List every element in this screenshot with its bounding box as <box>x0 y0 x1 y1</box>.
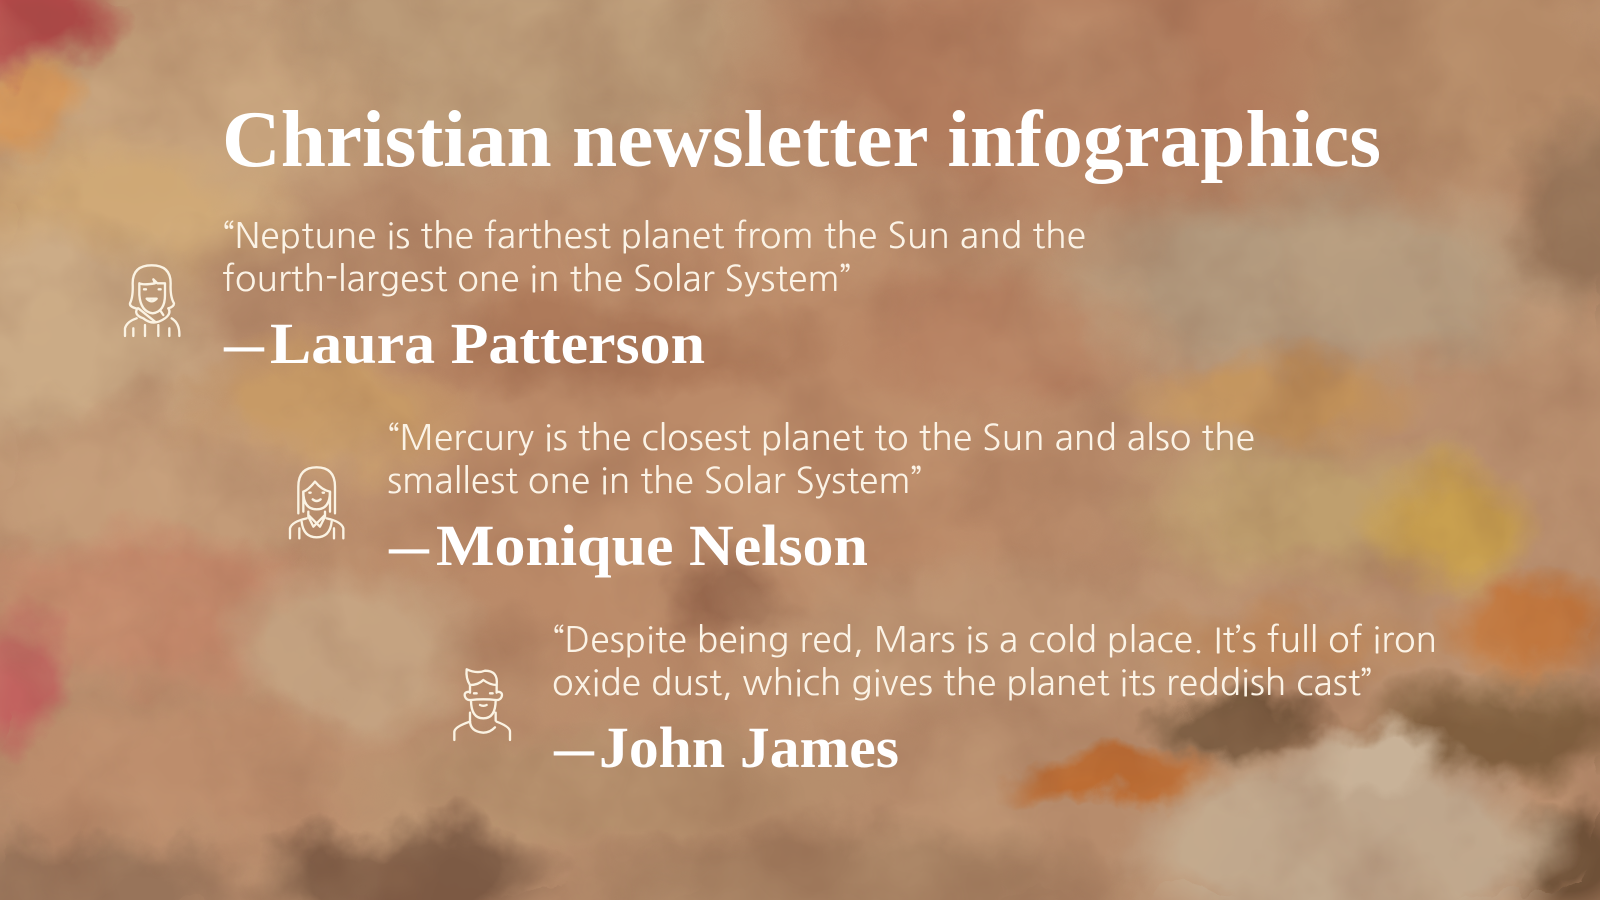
name: Laura Patterson <box>270 311 705 376</box>
name: — <box>553 715 595 780</box>
quote text <box>552 622 1437 701</box>
icon: woman with long hair <box>290 467 343 538</box>
quote text: “Neptune is the farthest planet from the Sun and the <box>222 218 1086 254</box>
name: John James <box>599 715 899 780</box>
name: — <box>388 513 430 578</box>
testimonial: Laura Patterson <box>125 218 1086 376</box>
quote text <box>387 421 1255 499</box>
testimonial: John James <box>454 622 1437 780</box>
quote text: fourth-largest one in the Solar System” <box>222 261 852 297</box>
quote text: oxide dust, which gives the planet its reddish cast” <box>552 666 1373 701</box>
quote text: “Despite being red, Mars is a cold place. It’s full of iron <box>552 622 1437 658</box>
quote text: “Mercury is the closest planet to the Sun and also the <box>387 421 1255 456</box>
name: Monique Nelson <box>436 513 868 578</box>
quote text: smallest one in the Solar System” <box>387 464 923 499</box>
quote text <box>222 218 1086 297</box>
icon: man with beard <box>454 669 510 740</box>
icon: woman with scarf <box>125 265 179 336</box>
name: — <box>223 311 265 376</box>
testimonial: Monique Nelson <box>290 421 1255 578</box>
title: Christian newsletter infographics <box>222 96 1381 184</box>
